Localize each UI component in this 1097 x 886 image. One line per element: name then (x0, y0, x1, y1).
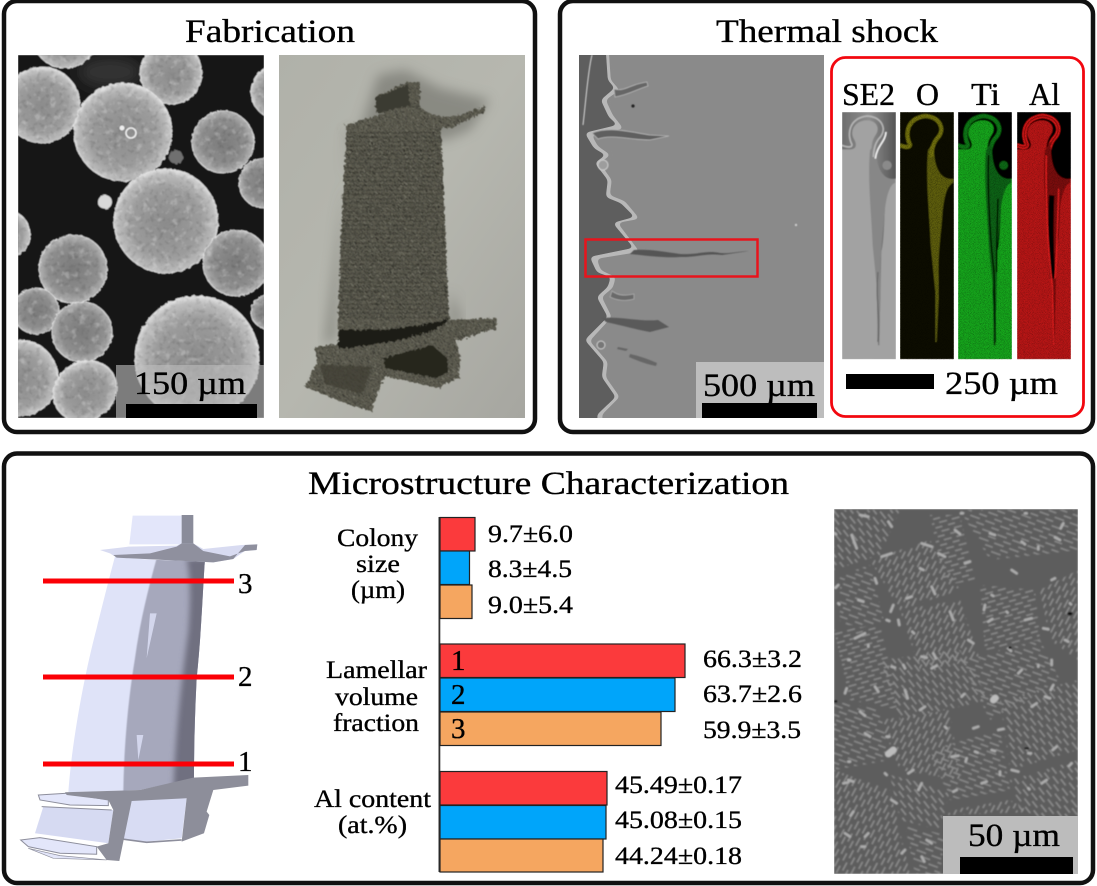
section line 3 (43, 568, 252, 600)
group: lamellar values (703, 644, 802, 744)
group: colony size values (488, 519, 573, 619)
group: Al content bars (440, 772, 607, 872)
group label: lamellar volume fraction: volume (335, 682, 418, 711)
map: Ti (958, 112, 1012, 359)
heading: Fabrication: Fabrication (185, 14, 355, 50)
panel: microstructure characterization (4, 454, 1093, 883)
group: colony size values: 8.3±4.5 (488, 554, 572, 583)
map label SE2: SE2 (842, 76, 895, 112)
scale text 500 µm: 500 µm (703, 368, 815, 404)
heading: Microstructure Characterization: Microstructure Characterization (308, 466, 789, 502)
scale text 150 µm: 150 µm (134, 366, 246, 402)
group: colony size bars (440, 518, 475, 618)
panel: fabrication (0, 1, 535, 434)
map label Al: Al (1029, 76, 1060, 112)
section line 1: 1 (238, 746, 252, 778)
group label: Al content (314, 784, 431, 839)
axis line (438, 517, 440, 872)
heading: Thermal shock: Thermal shock (716, 14, 939, 50)
scale bar 500 µm (702, 403, 817, 418)
group: colony size values: 9.7±6.0 (488, 519, 573, 548)
scale text 50 µm: 50 µm (968, 818, 1060, 854)
scale label box (696, 362, 824, 418)
blade airfoil (67, 555, 210, 795)
group: Al content values: 45.49±0.17 (615, 770, 742, 799)
group: Al content values (615, 770, 742, 870)
group: Al content values: 45.08±0.15 (615, 805, 742, 834)
map label O: O (916, 76, 939, 112)
powder micrograph (18, 55, 264, 418)
bar position labels: 2 (451, 679, 466, 711)
bar position labels: 3 (451, 713, 466, 745)
section line 2: 2 (238, 661, 252, 693)
group: lamellar values: 66.3±3.2 (703, 644, 802, 673)
bar position labels: 1 (451, 645, 466, 677)
scale bar 150 µm (126, 404, 257, 418)
scale bar 50 µm (960, 857, 1073, 874)
group label: Al content: (at.%) (338, 810, 407, 839)
group: Al content values: 44.24±0.18 (615, 841, 742, 870)
map: O (900, 112, 954, 359)
microstructure micrograph (834, 509, 1078, 874)
map: SE2 (842, 112, 896, 359)
map: Al (1017, 112, 1071, 359)
map label Ti: Ti (971, 76, 1000, 112)
group: lamellar values: 63.7±2.6 (703, 679, 802, 708)
dark inner surfaces (375, 84, 410, 113)
blade top shroud (100, 543, 257, 562)
blade lower light panels (21, 793, 187, 860)
section line 2 (43, 661, 252, 693)
group label: colony size: (µm) (351, 575, 405, 604)
blade top block (129, 515, 193, 544)
group label: colony size (337, 523, 418, 604)
group label: colony size: Colony (337, 523, 418, 552)
cross-section micrograph (579, 50, 830, 425)
group label: colony size: size (356, 549, 400, 578)
group label: Al content: Al content (314, 784, 431, 813)
section line 3: 3 (238, 568, 252, 600)
blade cross-section (65, 775, 248, 861)
group label: lamellar volume fraction (326, 655, 428, 737)
bar position labels (451, 645, 466, 745)
scale label box (943, 816, 1078, 874)
panel: thermal shock (560, 1, 1093, 432)
red highlight rectangle (586, 240, 758, 276)
group label: lamellar volume fraction: Lamellar (326, 655, 428, 684)
blade 3D model (21, 515, 257, 861)
group label: lamellar volume fraction: fraction (333, 708, 419, 737)
photo of printed blade (279, 55, 525, 420)
group: lamellar bars (440, 644, 685, 746)
scale bar 250 µm (846, 374, 934, 389)
group: colony size values: 9.0±5.4 (488, 590, 573, 619)
scale text 250 µm: 250 µm (945, 366, 1058, 402)
scale label box (116, 365, 264, 418)
group: lamellar values: 59.9±3.5 (703, 715, 801, 744)
section line 1 (43, 746, 252, 778)
callout: element maps (832, 58, 1084, 416)
bar chart (314, 517, 802, 872)
